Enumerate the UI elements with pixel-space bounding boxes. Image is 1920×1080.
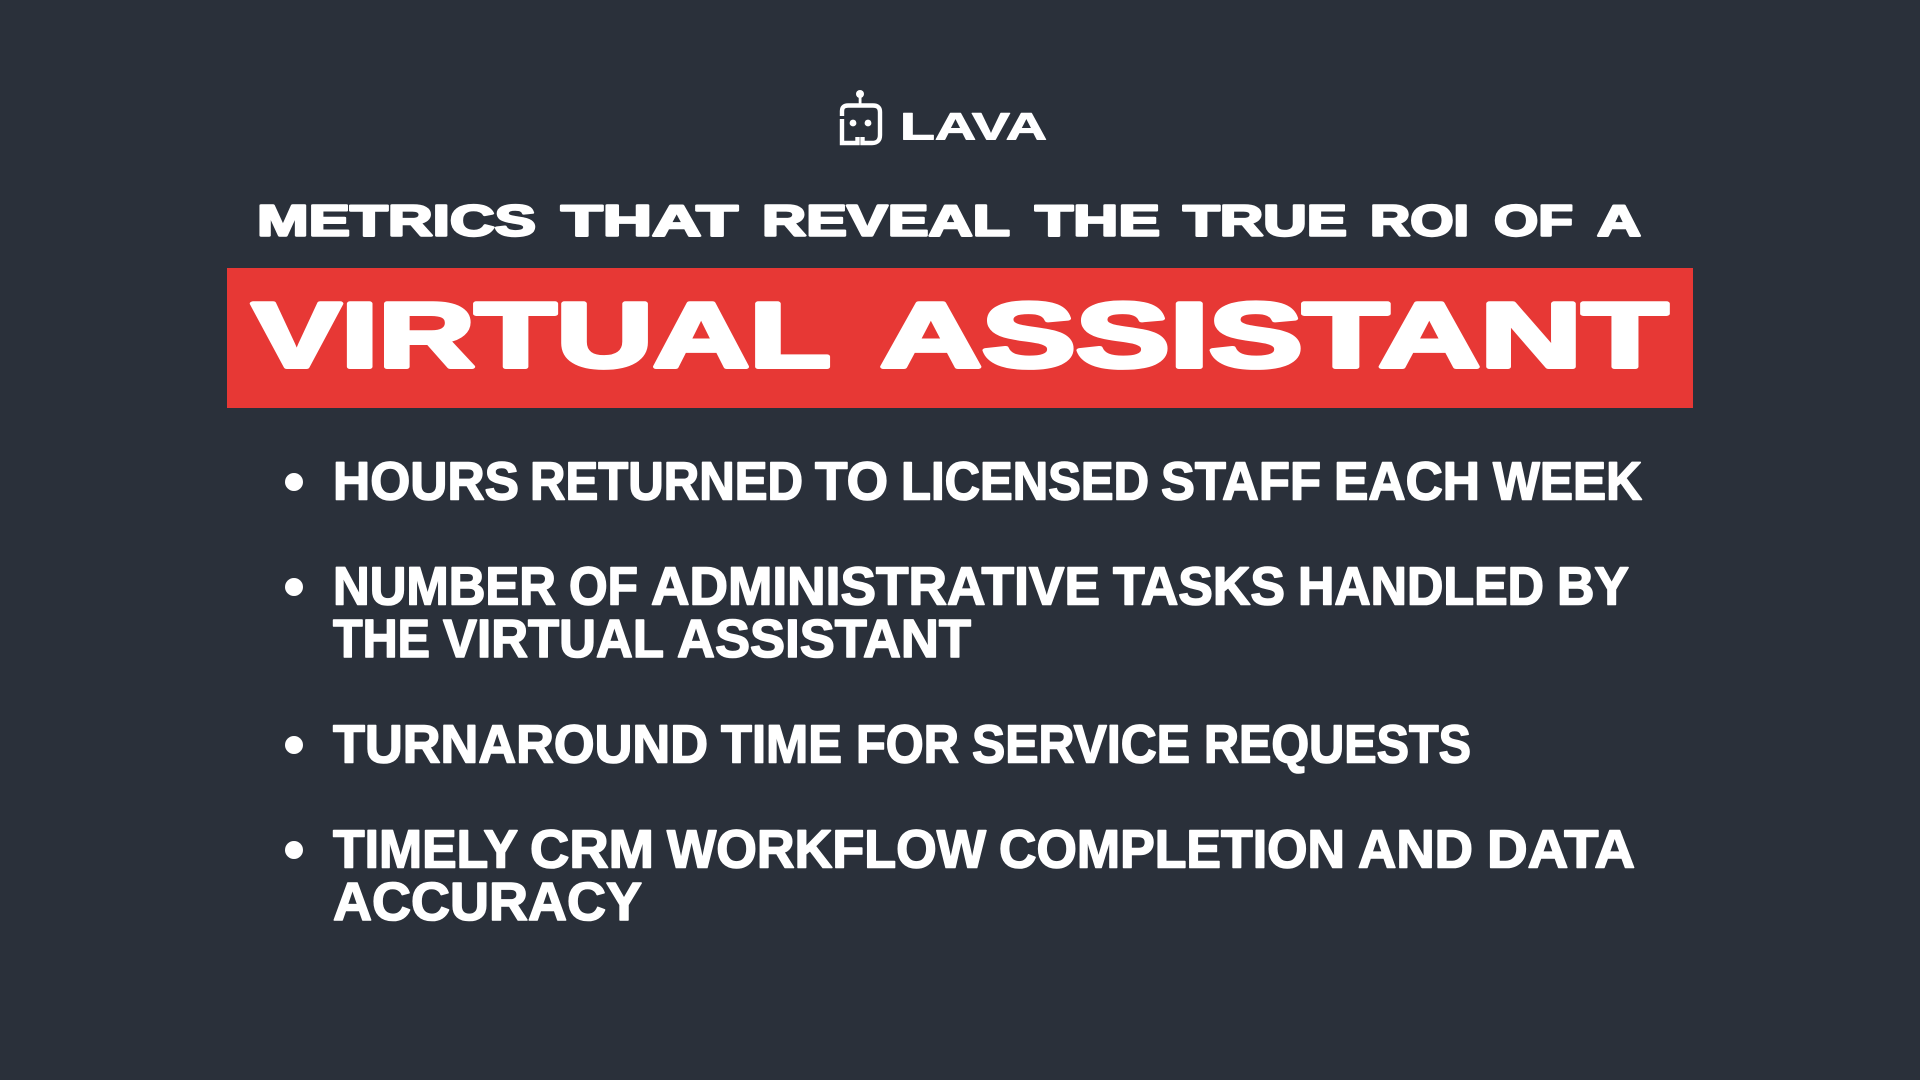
- bullet: CRM workflow: TIMELY: [333, 819, 518, 879]
- banner title: ASSISTANT: [880, 285, 1668, 387]
- subtitle heading: TRUE: [1183, 197, 1347, 246]
- bullet: turnaround time: [285, 714, 1471, 774]
- bullet: turnaround time: FOR: [856, 714, 959, 774]
- bullet: hours returned: RETURNED: [530, 451, 803, 511]
- bullet: turnaround time: TURNAROUND: [333, 714, 708, 774]
- subtitle heading: ROI: [1370, 197, 1469, 246]
- bullet: administrative tasks: HANDLED: [1298, 556, 1544, 616]
- subtitle heading: OF: [1494, 197, 1573, 246]
- banner title: [252, 285, 1668, 387]
- bullet: administrative tasks: ASSISTANT: [677, 609, 971, 669]
- bullet: administrative tasks: OF: [569, 556, 638, 616]
- bullet: CRM workflow: DATA: [1487, 819, 1635, 879]
- bullet: CRM workflow: [285, 819, 1635, 932]
- bullet: administrative tasks: ADMINISTRATIVE: [651, 556, 1100, 616]
- bullet: hours returned: TO: [815, 451, 888, 511]
- logo wordmark: LAVA: [900, 106, 1047, 148]
- logo: LAVA: [842, 90, 1047, 148]
- bullet: administrative tasks: VIRTUAL: [443, 609, 664, 669]
- bullet: administrative tasks: TASKS: [1113, 556, 1285, 616]
- subtitle heading: METRICS: [257, 197, 536, 246]
- icon: robot head: [842, 90, 880, 143]
- banner background: [227, 268, 1693, 408]
- bullet: CRM workflow: AND: [1358, 819, 1473, 879]
- bullet: administrative tasks: BY: [1557, 556, 1629, 616]
- bullet: hours returned: WEEK: [1493, 451, 1642, 511]
- subtitle heading: A: [1597, 197, 1641, 246]
- subtitle heading: [257, 197, 1641, 246]
- bullet: turnaround time: REQUESTS: [1204, 714, 1471, 774]
- subtitle heading: REVEAL: [762, 197, 1010, 246]
- bullet: CRM workflow: CRM: [530, 819, 654, 879]
- subtitle heading: THAT: [561, 197, 738, 246]
- bullet: administrative tasks: THE: [333, 609, 430, 669]
- metrics bullet list: [285, 451, 1642, 932]
- bullet: administrative tasks: NUMBER: [333, 556, 556, 616]
- bullet: CRM workflow: WORKFLOW: [667, 819, 986, 879]
- title banner: [227, 268, 1693, 408]
- bullet: turnaround time: TIME: [721, 714, 842, 774]
- bullet: hours returned: EACH: [1334, 451, 1480, 511]
- bullet: hours returned: STAFF: [1161, 451, 1321, 511]
- bullet: hours returned: HOURS: [333, 451, 519, 511]
- banner title: VIRTUAL: [252, 285, 831, 387]
- bullet: CRM workflow: COMPLETION: [999, 819, 1345, 879]
- bullet: hours returned: LICENSED: [901, 451, 1149, 511]
- subtitle heading: THE: [1035, 197, 1160, 246]
- bullet: CRM workflow: ACCURACY: [333, 872, 642, 932]
- bullet: administrative tasks: [285, 556, 1629, 669]
- bullet: turnaround time: SERVICE: [972, 714, 1190, 774]
- bullet: hours returned: [285, 451, 1642, 511]
